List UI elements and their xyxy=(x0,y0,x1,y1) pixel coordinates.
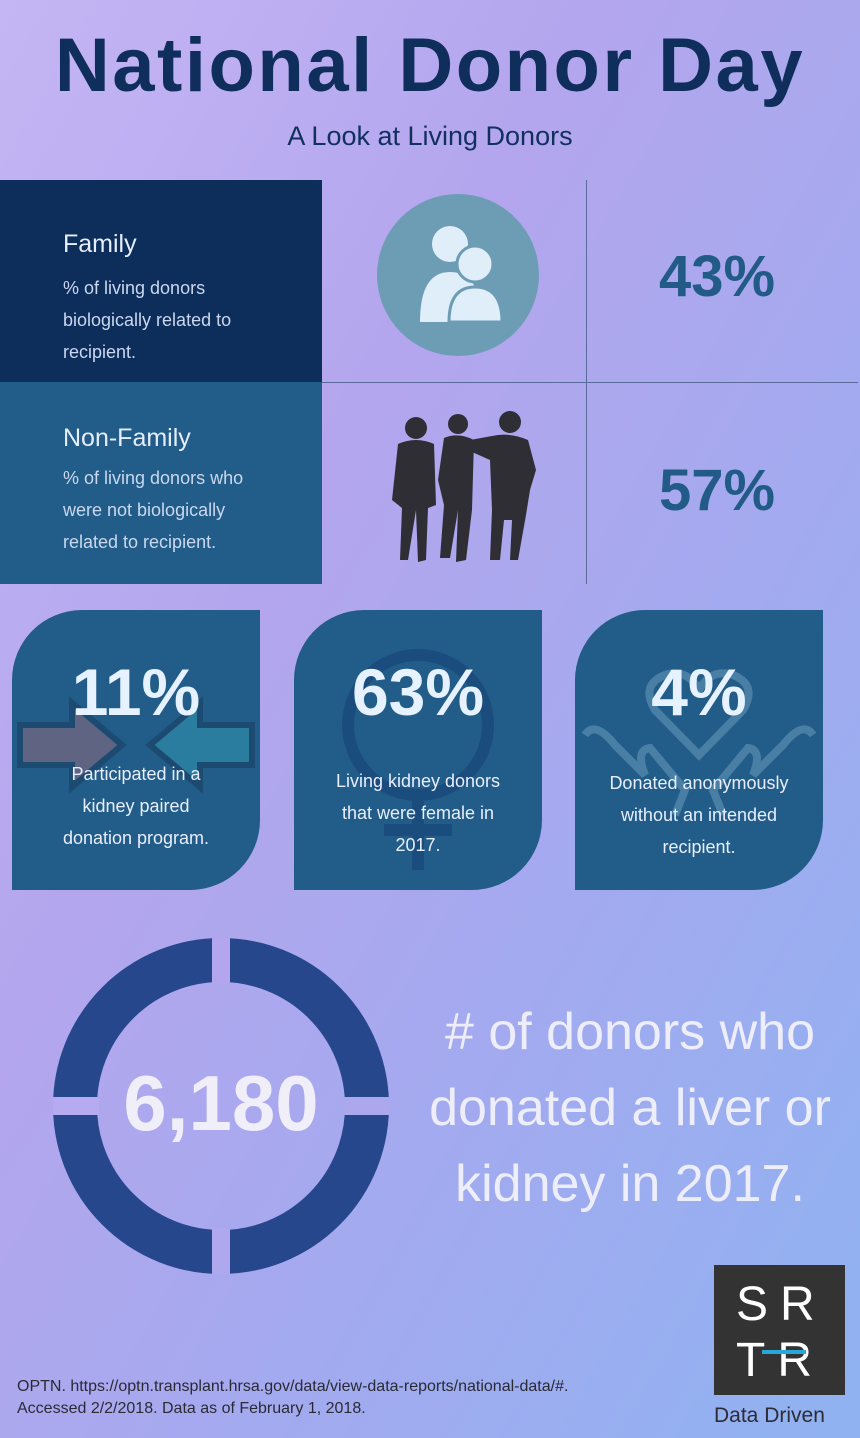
card: female: 63% xyxy=(352,655,484,729)
title: National Donor Day xyxy=(55,23,805,108)
logo: SRTR xyxy=(714,1265,845,1395)
logo: SRTR: SR xyxy=(736,1278,827,1331)
icon: people silhouettes xyxy=(392,411,536,562)
stat 57%: 57% xyxy=(659,458,775,523)
subtitle: A Look at Living Donors xyxy=(287,121,573,151)
grid lines xyxy=(586,180,587,584)
card: paired donation: 11% xyxy=(72,655,200,729)
panel: family: biologically related to xyxy=(63,310,231,330)
source text: Accessed 2/2/2018. Data as of February 1, 2018. xyxy=(17,1400,366,1417)
icon: arrows xyxy=(17,696,255,794)
chart: donut ring xyxy=(53,938,389,1274)
stat 43%: 43% xyxy=(659,244,775,309)
panel: non-family: related to recipient. xyxy=(63,532,216,552)
big number: 6,180 xyxy=(123,1059,319,1147)
text: Data Driven xyxy=(714,1404,825,1427)
card: anonymous: Donated anonymously without an intended recipient. xyxy=(609,773,789,857)
panel: non-family xyxy=(0,382,322,584)
panel: family xyxy=(0,180,322,382)
icon: logo dot xyxy=(762,1350,806,1354)
source text: OPTN. https://optn.transplant.hrsa.gov/data/view-data-reports/national-data/#. xyxy=(17,1378,568,1395)
panel: non-family: were not biologically xyxy=(63,500,225,520)
icon: heart hands xyxy=(582,669,816,816)
source text xyxy=(17,1378,568,1417)
card: female xyxy=(294,610,542,890)
icon: family xyxy=(377,194,539,356)
panel: family: % of living donors xyxy=(63,278,205,298)
card: female: Living kidney donors that were female in 2017. xyxy=(336,771,500,855)
card: paired donation: Participated in a kidney paired donation program. xyxy=(63,764,209,848)
card: anonymous: 4% xyxy=(651,655,747,729)
logo: SRTR: TR xyxy=(736,1334,824,1387)
card: paired donation xyxy=(12,610,260,890)
panel: family: recipient. xyxy=(63,342,136,362)
card: anonymous xyxy=(575,610,823,890)
text: liver/kidney: # of donors who donated a liver or kidney in 2017. xyxy=(429,1003,831,1213)
panel: family: Family xyxy=(63,230,137,258)
panel: non-family: Non-Family xyxy=(63,424,191,452)
icon: female symbol xyxy=(342,649,494,870)
panel: non-family: % of living donors who xyxy=(63,468,243,488)
